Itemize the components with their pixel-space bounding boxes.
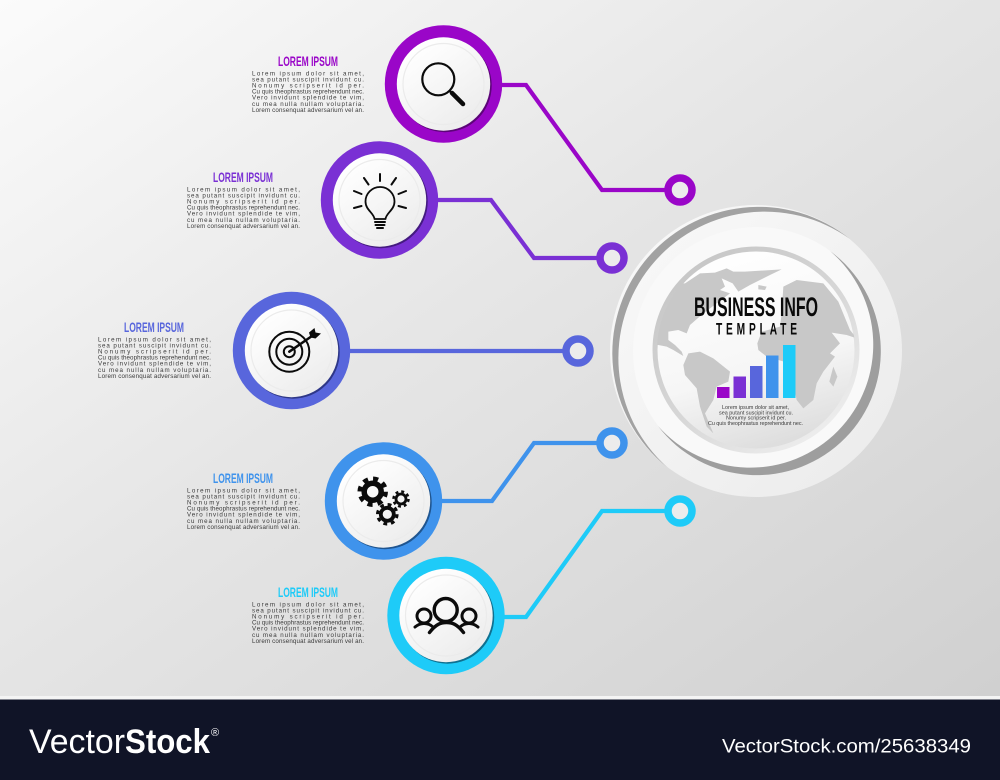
connector: step 1 — [500, 85, 692, 202]
text block: step 3: Nonumy scripserit id per. — [98, 348, 211, 356]
heading: step 3: LOREM IPSUM — [124, 319, 184, 335]
icon: magnifying glass — [422, 63, 463, 104]
text block: step 3: Lorem ipsum dolor sit amet, — [98, 336, 211, 343]
text block: step 3: cu mea nulla nullam voluptaria. — [98, 367, 211, 374]
title: TEMPLATE — [716, 319, 797, 338]
footer strip — [0, 696, 1000, 700]
logo: VectorStock: ® — [211, 727, 219, 739]
text block: step 1: Lorem consenquat adversarium vel an. — [252, 107, 364, 114]
outer crescent — [612, 207, 850, 467]
logo: VectorStock — [29, 723, 219, 761]
text block: step 2: Lorem consenquat adversarium vel an. — [187, 223, 300, 230]
text block: step 5: cu mea nulla nullam voluptaria. — [252, 632, 364, 639]
caption: Nonumy scripserit id per. — [726, 416, 786, 422]
caption: sea putant suscipit invidunt cu. — [719, 410, 793, 416]
text block: step 4: Vero invidunt splendide te vim, — [187, 512, 300, 519]
text block: step 4: cu mea nulla nullam voluptaria. — [187, 518, 300, 525]
caption: Cu quis theophrastus reprehendunt nec. — [708, 421, 803, 427]
middle disc — [633, 227, 881, 475]
icon: light bulb — [354, 174, 406, 228]
panel: step 5 team — [252, 557, 505, 674]
text block: step 3: Vero invidunt splendide te vim, — [98, 361, 211, 368]
outer disc — [610, 205, 902, 497]
panel: step 4 gears — [187, 442, 442, 560]
text block: step 4: Lorem consenquat adversarium vel an. — [187, 524, 300, 531]
text block: step 5 — [252, 601, 364, 645]
text block: step 1 — [252, 70, 364, 114]
badge: step 4 — [325, 442, 442, 560]
connector: step 2 — [436, 200, 624, 270]
badge: step 2 — [321, 141, 438, 259]
text block: step 2: Vero invidunt splendide te vim, — [187, 211, 300, 218]
title: BUSINESS INFO — [694, 292, 818, 322]
text block: step 5: sea putant suscipit invidunt cu. — [252, 607, 364, 614]
text block: step 1: Cu quis theophrastus reprehendunt nec. — [252, 89, 364, 96]
text block: step 3: Lorem consenquat adversarium vel an. — [98, 373, 211, 380]
bar chart — [717, 345, 796, 398]
heading: step 4: LOREM IPSUM — [213, 470, 273, 486]
connector: step 3 — [348, 339, 590, 363]
footer band — [0, 700, 1000, 780]
icon: team of people — [415, 598, 478, 632]
text block: step 4: Nonumy scripserit id per. — [187, 500, 300, 506]
panel: step 1 search — [252, 25, 502, 143]
text block: step 5: Vero invidunt splendide te vim, — [252, 626, 364, 633]
icon: target with arrow — [269, 328, 321, 372]
connector: step 4 — [440, 431, 624, 501]
badge: step 5 — [387, 557, 505, 674]
text block: step 1: Nonumy scripserit id per. — [252, 82, 364, 90]
text block: step 5: Lorem ipsum dolor sit amet, — [252, 601, 364, 608]
panel: step 3 target — [98, 292, 350, 409]
text block: step 1: Vero invidunt splendide te vim, — [252, 95, 364, 102]
text block: step 3: Cu quis theophrastus reprehendunt nec. — [98, 355, 211, 362]
caption: Lorem ipsum dolor sit amet, — [722, 405, 790, 411]
heading: step 1: LOREM IPSUM — [278, 53, 338, 69]
heading: step 5: LOREM IPSUM — [278, 584, 338, 600]
inner rim — [655, 249, 857, 451]
text block: step 4: Lorem ipsum dolor sit amet, — [187, 487, 300, 494]
logo: VectorStock: Vector — [29, 723, 125, 761]
connector: step 5 — [502, 499, 692, 617]
world map — [643, 268, 857, 433]
text block: step 5: Lorem consenquat adversarium vel an. — [252, 638, 364, 645]
logo: VectorStock: Stock — [125, 723, 210, 761]
icon: gears — [360, 479, 408, 524]
text block: step 2: sea putant suscipit invidunt cu. — [187, 192, 300, 199]
text block: step 4 — [187, 487, 300, 531]
text block: step 2: Lorem ipsum dolor sit amet, — [187, 186, 300, 193]
panel: step 2 idea — [187, 141, 438, 259]
title — [694, 292, 818, 338]
heading: step 2: LOREM IPSUM — [213, 169, 273, 185]
text block: step 3: sea putant suscipit invidunt cu. — [98, 342, 211, 349]
badge: step 3 — [233, 292, 350, 409]
text block: step 1: sea putant suscipit invidunt cu. — [252, 76, 364, 83]
text block: step 1: Lorem ipsum dolor sit amet, — [252, 70, 364, 77]
text block: step 2: cu mea nulla nullam voluptaria. — [187, 217, 300, 224]
text block: step 4: sea putant suscipit invidunt cu. — [187, 493, 300, 500]
text block: step 2: Nonumy scripserit id per. — [187, 198, 300, 206]
inner crescent — [658, 251, 881, 475]
text block: step 5: Cu quis theophrastus reprehendunt nec. — [252, 620, 364, 627]
text block: step 4: Cu quis theophrastus reprehendunt nec. — [187, 506, 300, 513]
text block: step 5: Nonumy scripserit id per. — [252, 614, 364, 620]
text block: step 2 — [187, 186, 300, 230]
text block: step 2: Cu quis theophrastus reprehendunt nec. — [187, 205, 300, 212]
image id: VectorStock.com/25638349 — [722, 737, 971, 758]
text block: step 1: cu mea nulla nullam voluptaria. — [252, 101, 364, 108]
panel: central globe — [610, 205, 902, 497]
badge: step 1 — [385, 25, 502, 143]
text block: step 3 — [98, 336, 211, 380]
caption — [708, 405, 803, 427]
